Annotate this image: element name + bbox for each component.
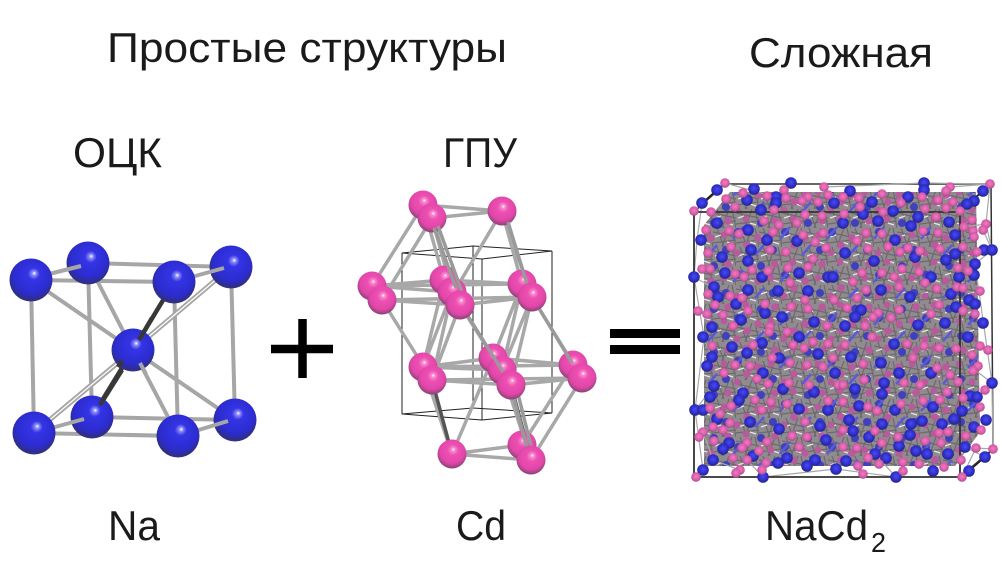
label: NaCd2: 2 [871, 527, 886, 558]
equals sign [610, 329, 680, 354]
NaCd2 complex structure simulation box [688, 177, 998, 483]
label: NaCd2: NaCd [765, 502, 868, 549]
title: complex: Сложная [749, 29, 933, 76]
label: BCC: ОЦК [73, 129, 163, 176]
title: simple structures: Простые структуры [107, 24, 507, 71]
label: Cd: Cd [456, 502, 506, 549]
plus sign [271, 319, 333, 378]
HCP crystal structure of cadmium [358, 190, 596, 474]
label: HCP: ГПУ [443, 129, 517, 176]
BCC crystal structure of sodium [10, 242, 256, 458]
label: Na: Na [108, 502, 161, 549]
